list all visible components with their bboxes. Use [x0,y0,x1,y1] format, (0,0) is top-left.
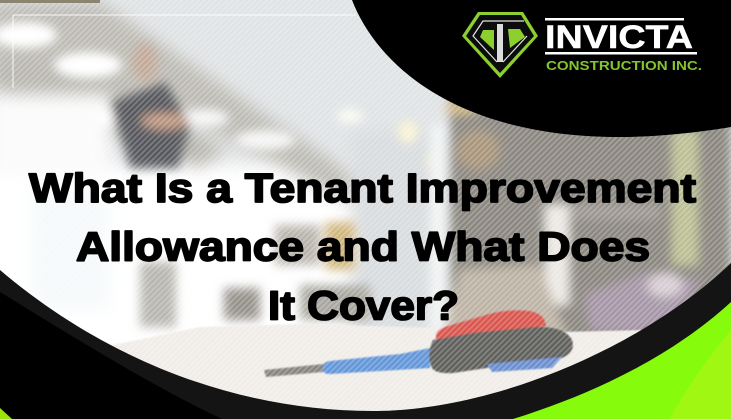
logo rule bottom [545,52,697,54]
thin white frame line [13,15,356,88]
bottom right green shape [513,302,731,419]
bottom dark curved band [0,263,731,419]
icon: screwdrivers [264,310,573,377]
logo subtitle: CONSTRUCTION INC. [546,58,702,73]
bottom left black shape [0,292,222,419]
logo rule top [545,18,684,20]
table surface [0,300,731,419]
logo: Invicta Construction [462,12,702,78]
top right black curved panel [352,0,731,137]
person figure [95,43,190,168]
title: Allowance and What Does [76,224,650,270]
logo wordmark: INVICTA [545,19,693,55]
title: It Cover? [268,282,459,328]
title: What Is a Tenant Improvement [29,165,696,211]
bottom left green corner [0,408,12,419]
title [29,165,696,328]
icon: diamond emblem [462,12,538,78]
bottom right light green accent [670,330,731,419]
